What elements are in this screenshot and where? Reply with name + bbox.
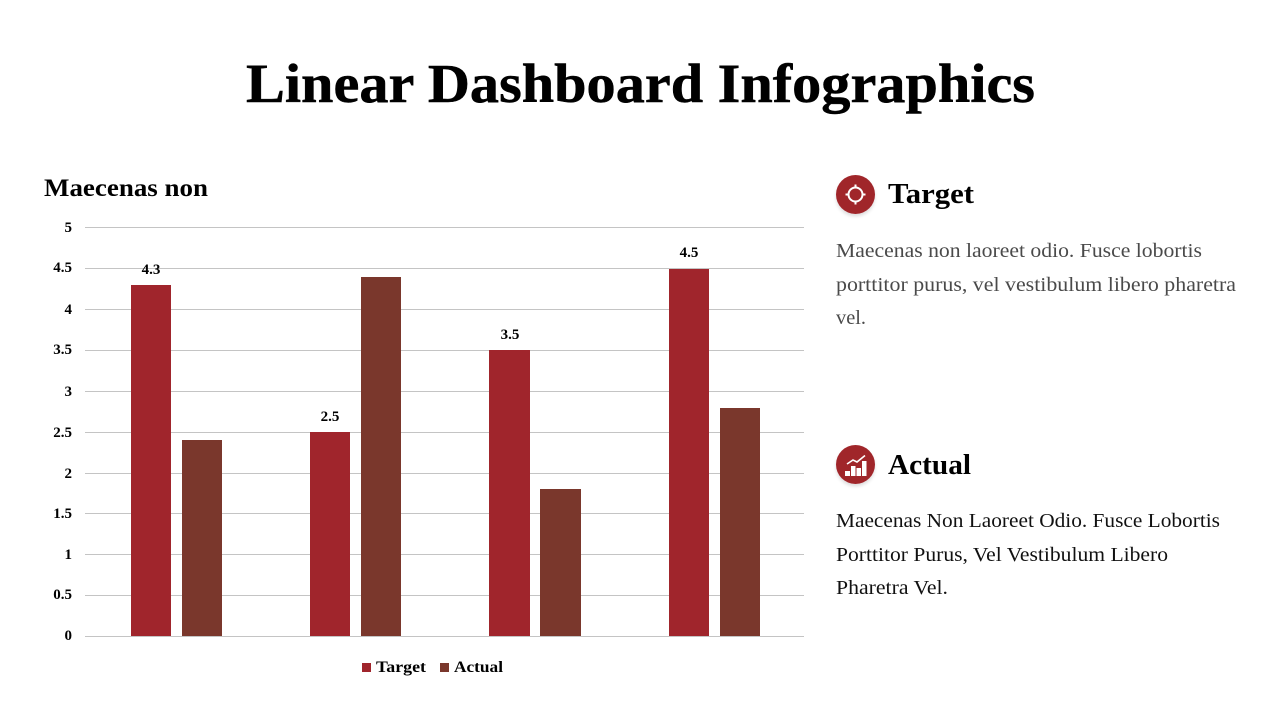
y axis labels: 1.5 xyxy=(53,506,72,522)
actual heading: Actual xyxy=(888,450,971,481)
data labels: 3.5 xyxy=(501,327,519,343)
target description: Maecenas non laoreet odio. Fusce lobortis xyxy=(836,240,1202,262)
panel: target xyxy=(836,175,1236,329)
icon: growth chart xyxy=(836,445,875,484)
y axis labels: 3.5 xyxy=(53,342,72,358)
actual description: Maecenas Non Laoreet Odio. Fusce Lobortis xyxy=(836,510,1220,532)
y axis labels: 1 xyxy=(64,547,72,563)
y axis labels: 4 xyxy=(64,302,72,318)
y axis labels: 0 xyxy=(64,628,72,644)
actual description: Porttitor Purus, Vel Vestibulum Libero xyxy=(836,544,1168,566)
legend xyxy=(362,659,504,676)
y axis labels: 5 xyxy=(64,220,72,236)
panel: actual xyxy=(836,445,1220,599)
y axis labels: 3 xyxy=(64,384,72,400)
data labels: 4.5 xyxy=(680,245,698,261)
data labels: 4.3 xyxy=(142,262,160,278)
panel: bar chart xyxy=(44,175,804,676)
target description xyxy=(836,240,1236,329)
y axis labels: 2.5 xyxy=(53,425,72,441)
y axis labels: 2 xyxy=(64,466,72,482)
y axis labels: 4.5 xyxy=(53,260,72,276)
target description: porttitor purus, vel vestibulum libero pharetra xyxy=(836,274,1236,296)
data labels xyxy=(142,245,698,425)
target heading: Target xyxy=(888,179,975,210)
target description: vel. xyxy=(836,307,866,329)
y axis labels xyxy=(53,220,72,644)
actual bars xyxy=(182,277,760,636)
chart heading: Maecenas non xyxy=(44,175,208,202)
y axis labels: 0.5 xyxy=(53,587,72,603)
actual description: Pharetra Vel. xyxy=(836,577,948,599)
data labels: 2.5 xyxy=(321,409,339,425)
legend: Target xyxy=(376,659,427,676)
icon: crosshair target xyxy=(836,175,875,214)
actual description xyxy=(836,510,1220,599)
target bars xyxy=(131,269,709,636)
title: Linear Dashboard Infographics xyxy=(246,53,1035,114)
legend: Actual xyxy=(454,659,504,676)
